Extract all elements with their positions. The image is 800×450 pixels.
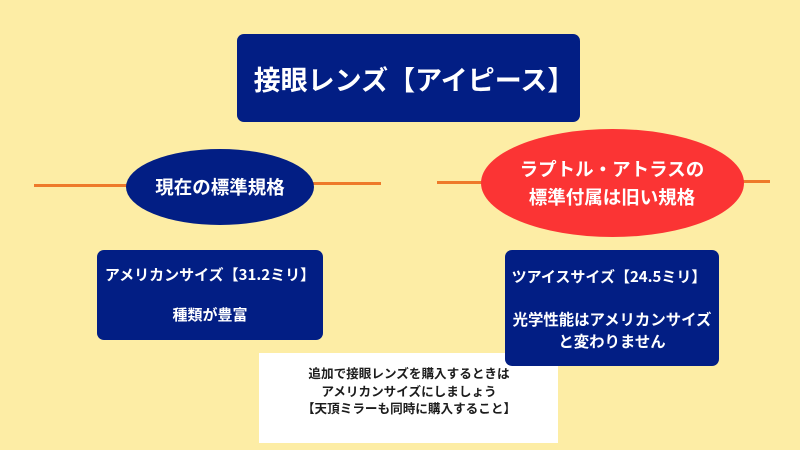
- left panel: American size: [97, 250, 323, 340]
- left oval: current standard: 現在の標準規格: [155, 174, 285, 200]
- left panel: American size: アメリカンサイズ【31.2ミリ】: [105, 264, 315, 285]
- right panel: Twist size: 光学性能はアメリカンサイズ: [513, 308, 711, 330]
- title: 接眼レンズ【アイピース】: [254, 59, 574, 98]
- right oval: old standard: 標準付属は旧い規格: [529, 184, 695, 210]
- right panel: Twist size: と変わりません: [558, 330, 666, 352]
- note: purchase advice: 追加で接眼レンズを購入するときは: [308, 363, 510, 382]
- connector line: right oval, left side: [437, 181, 489, 184]
- title: [237, 34, 580, 122]
- connector line: right oval, right side: [736, 180, 770, 183]
- right panel: Twist size: [505, 250, 719, 366]
- left oval: current standard: [126, 149, 314, 225]
- right oval: old standard: ラプトル・アトラスの: [520, 156, 704, 182]
- connector line: left oval, right side: [306, 182, 381, 185]
- note: purchase advice: [259, 353, 558, 443]
- connector line: left oval, left side: [34, 184, 134, 187]
- right oval: old standard: [481, 129, 744, 237]
- note: purchase advice: 【天頂ミラーも同時に購入すること】: [302, 398, 516, 417]
- right panel: Twist size: ツアイスサイズ【24.5ミリ】: [512, 266, 706, 287]
- note: purchase advice: アメリカンサイズにしましょう: [321, 380, 497, 400]
- left panel: American size: 種類が豊富: [172, 304, 248, 325]
